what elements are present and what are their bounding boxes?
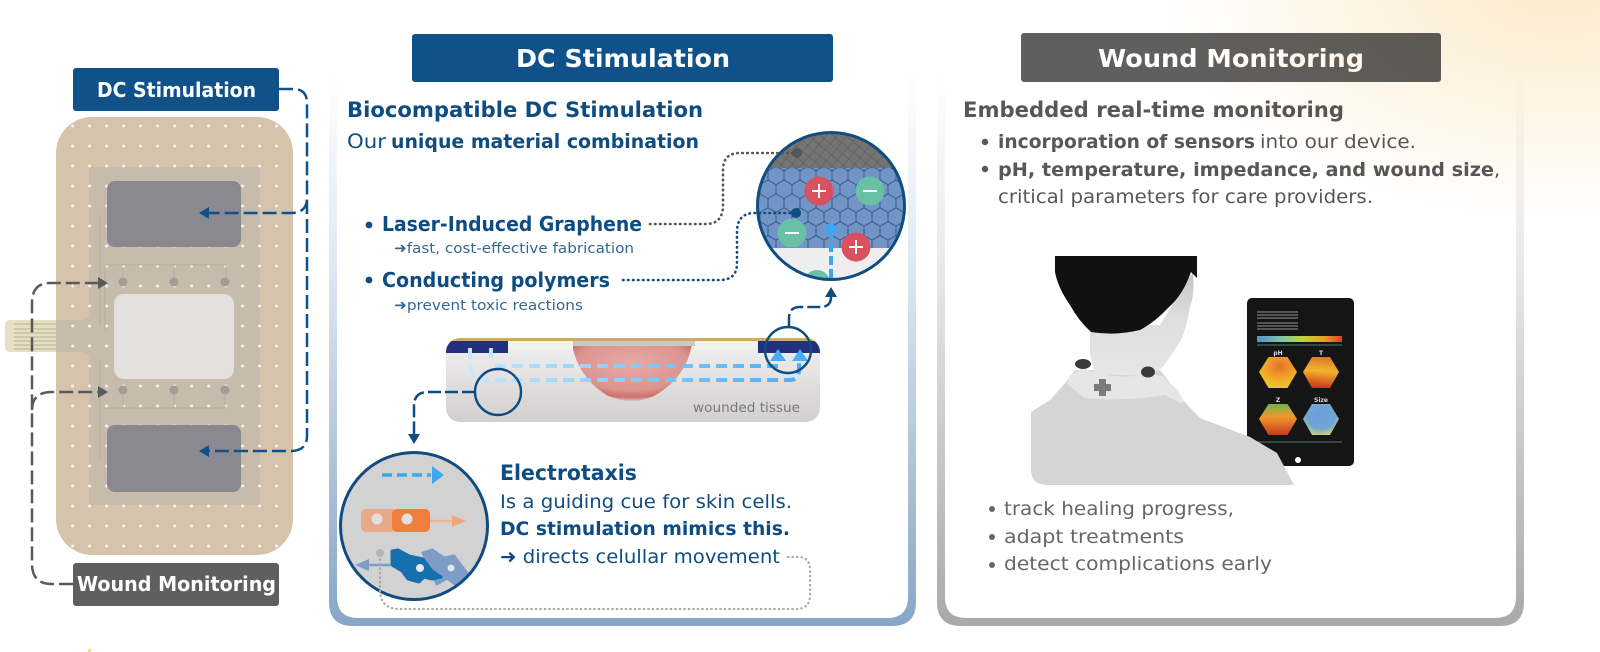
panel interior (945, 72, 1516, 618)
heading: biocompatible: Biocompatible DC Stimulation (347, 98, 703, 122)
text: electrotaxis (500, 461, 792, 568)
adhesive dot pattern (64, 118, 285, 554)
sensor bullets (982, 131, 1500, 208)
wounded tissue label: wounded tissue (693, 400, 800, 416)
material: graphene (366, 212, 642, 257)
panel heading (412, 34, 833, 82)
outcome bullets (989, 498, 1272, 575)
panel frame (937, 72, 1524, 626)
panel interior (337, 72, 908, 618)
heatmap: pH (1259, 350, 1297, 388)
outcome bullets: track healing progress, (1004, 498, 1234, 520)
charge: plus (842, 232, 870, 262)
material: graphene: ➜fast, cost-effective fabrication (394, 241, 634, 257)
text: electrotaxis: DC stimulation mimics this. (500, 518, 790, 540)
current flow lines (470, 348, 799, 380)
zoom circle: electrotaxis (340, 452, 488, 600)
sensor bullets: incorporation of sensors (998, 131, 1255, 153)
cells: orange (361, 509, 466, 532)
arrow: to material zoom (789, 287, 837, 327)
sensor dots (118, 278, 230, 394)
panel heading: DC Stimulation (516, 44, 730, 73)
panel: bandage device (5, 117, 293, 555)
tablet text lines (1257, 312, 1298, 329)
connector tab (5, 320, 75, 352)
heatmap: T: T (1319, 350, 1324, 357)
charge: minus (778, 218, 806, 248)
care provider figure (1031, 256, 1294, 485)
label: Wound Monitoring (73, 563, 279, 606)
heatmap: Size (1303, 397, 1339, 435)
dotted leader: graphene (650, 148, 802, 224)
sensor knobs (1075, 359, 1091, 369)
dotted leader: polymers (623, 208, 801, 280)
material: polymers (366, 268, 610, 314)
wound bed (572, 344, 692, 401)
zoom circle: electrode material (756, 131, 906, 281)
panel frame (329, 72, 916, 626)
panel heading: Wound Monitoring (1098, 44, 1364, 73)
sensor bullets: critical parameters for care providers. (998, 186, 1373, 208)
outcome bullets: detect complications early (1004, 553, 1272, 575)
panel: DC Stimulation (329, 34, 916, 626)
material: polymers: ➜prevent toxic reactions (394, 298, 583, 314)
heatmap: T (1303, 350, 1339, 388)
outcome bullets: adapt treatments (1004, 526, 1184, 548)
background glow (1150, 0, 1600, 230)
collar (1067, 368, 1184, 403)
panel heading (1021, 33, 1441, 82)
bandage body (56, 117, 293, 555)
panel: Wound Monitoring (937, 33, 1524, 626)
small yellow mark (88, 649, 91, 652)
sensor bullets: into our device. (1260, 131, 1416, 153)
text: electrotaxis: ➜ directs celullar movement (500, 546, 780, 568)
sensor bullets: pH, temperature, impedance, and wound size (998, 159, 1494, 181)
label: DC Stimulation: DC Stimulation (97, 78, 256, 102)
sensor layer (56, 167, 260, 505)
arrow: to electrotaxis zoom (408, 392, 475, 444)
current arrow (822, 221, 840, 278)
arrows: wound monitoring to sensors (32, 277, 108, 584)
material: polymers: Conducting polymers (382, 268, 610, 292)
shirt (1031, 370, 1294, 485)
wound window (114, 294, 234, 379)
hair (1055, 256, 1197, 334)
heatmap: Size: Size (1314, 397, 1328, 404)
sensor traces (100, 215, 226, 458)
heading: real-time monitoring: Embedded real-time monitoring (963, 98, 1344, 122)
field direction arrow (382, 466, 444, 484)
text: electrotaxis: Electrotaxis (500, 461, 637, 485)
electrode: top (107, 181, 241, 247)
colour scale (1257, 336, 1342, 342)
electrode: bottom (107, 425, 241, 492)
charge: minus (856, 176, 884, 206)
heatmap: pH: pH (1273, 350, 1283, 357)
arrows: DC stimulation to electrodes (199, 89, 307, 457)
material: graphene: Laser-Induced Graphene (382, 212, 642, 236)
label: DC Stimulation (73, 68, 279, 111)
wound cross-section (446, 327, 820, 422)
neck (1090, 272, 1194, 376)
subheading: Our (347, 130, 387, 153)
heatmap: Z (1259, 397, 1297, 435)
text: electrotaxis: Is a guiding cue for skin cells. (500, 491, 792, 513)
label: Wound Monitoring: Wound Monitoring (77, 572, 276, 596)
tablet (1247, 298, 1354, 466)
collar pin: cross (1094, 379, 1111, 396)
dotted leader: cell movement (376, 549, 810, 609)
charge: plus (804, 176, 834, 206)
subheading: unique material combination (391, 130, 699, 153)
cells: blue (355, 550, 469, 586)
heatmap: Z: Z (1276, 397, 1281, 404)
sensor bullets: , (1494, 159, 1500, 181)
